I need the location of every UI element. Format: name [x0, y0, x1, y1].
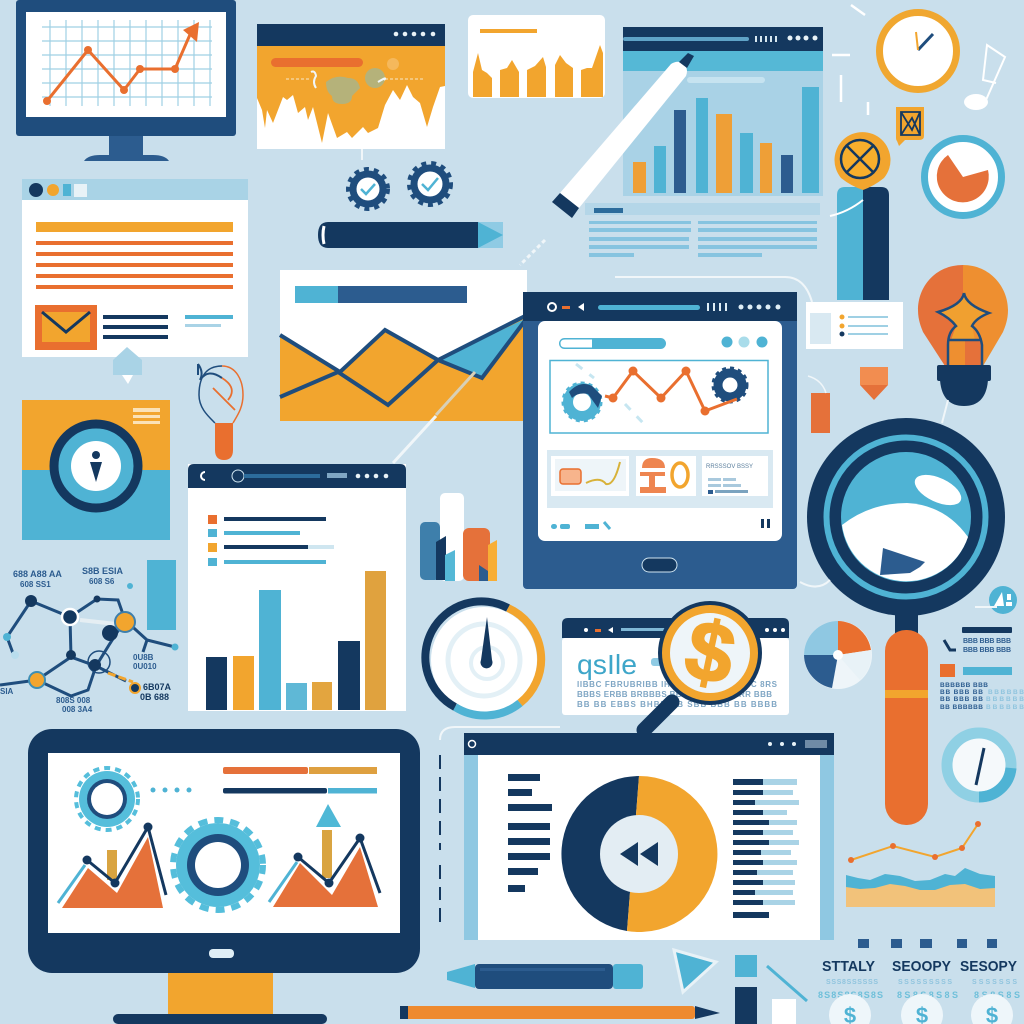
right mountain chart	[269, 804, 380, 907]
home button	[642, 558, 677, 572]
text block: right column notes: BB BBBBBB	[940, 704, 983, 711]
network labels: 008 3A4	[62, 705, 93, 714]
network labels: 0B 688	[140, 692, 169, 702]
text block: bottom-right labels: STTALY	[822, 958, 875, 975]
text block: bottom-right labels	[818, 939, 1020, 1024]
panel: small yellow bars card	[468, 15, 605, 98]
panel: bar chart window	[552, 27, 823, 257]
network labels: 6B07A	[143, 682, 172, 692]
network labels: 608 SS1	[20, 580, 51, 589]
panel: envelope line chart	[280, 270, 527, 421]
network labels: SIA	[0, 687, 14, 696]
list	[208, 515, 334, 566]
line chart box	[550, 360, 768, 433]
network labels	[0, 566, 172, 714]
icon: clock	[880, 12, 956, 90]
icon: target on pillar	[830, 132, 890, 300]
icon: dial	[947, 733, 1011, 797]
network labels: 0U8B	[133, 653, 154, 662]
orange trend line	[47, 30, 192, 101]
garbled caption: BB BB EBBS BHBB BB SBB BBB BB BBBB	[577, 700, 777, 709]
caption text lines	[585, 203, 820, 257]
icon: pie circle	[924, 138, 1002, 216]
dashed connector	[439, 755, 441, 925]
bars	[633, 87, 819, 193]
text block: right column notes: BB BBB BB	[940, 696, 983, 703]
small pie chart	[804, 621, 872, 689]
thumbnail row: RRSSSOV BSSY	[706, 464, 753, 470]
large gear	[173, 820, 263, 910]
text block: right column notes: BBBBBB	[986, 704, 1024, 711]
text block: bottom-right labels: 8S8S8S8S	[897, 990, 958, 1000]
icon: balloon pin	[198, 364, 243, 460]
icon: light bulb	[918, 265, 1008, 406]
gauge	[425, 601, 541, 716]
network labels: 0U010	[133, 662, 157, 671]
text block: bottom-right labels: SEOOPY	[892, 958, 951, 975]
network labels: S8B ESIA	[82, 566, 124, 576]
cyan rectangle block	[147, 560, 176, 630]
icon: magnifier with dollar: $	[678, 601, 743, 703]
icon: small 3D bars	[420, 493, 497, 581]
network labels: 608 S6	[89, 577, 115, 586]
panel: top-left monitor with line chart	[16, 0, 236, 161]
garbled caption: IIBBC FBRUBRIBB IHB BS 9RR BBB BBC 8RS	[577, 680, 778, 689]
text block: right column notes: BBBBBB BBB	[940, 682, 988, 689]
left bars	[508, 774, 552, 892]
text block: bottom-right labels: SSS8SSSSSS	[826, 979, 878, 986]
text block: bottom-right labels: SSSSSSSSS	[898, 979, 952, 986]
icon: orange pencil	[400, 1006, 720, 1019]
donut chart	[561, 776, 717, 932]
network labels: 808S 008	[56, 696, 91, 705]
progress bar	[559, 338, 666, 349]
icon: location pin with cone	[113, 347, 142, 384]
panel: search result window	[562, 618, 789, 715]
panel: orange waveform window	[257, 24, 445, 149]
icon: twin gears	[348, 163, 451, 209]
icon: orange arrow pentagon	[860, 367, 888, 400]
connector lines	[362, 5, 948, 740]
icon: orange tag	[896, 107, 924, 146]
text block: right column notes: BBB BBB BBB	[963, 638, 1011, 645]
right bars	[733, 779, 799, 918]
text block: bottom-right labels: SESOPY	[960, 958, 1017, 975]
small info card	[806, 302, 903, 349]
text block: bottom-right labels: 8S8S8S	[974, 990, 1020, 1000]
icon: cyan badge	[975, 586, 1017, 614]
legend bars	[223, 767, 308, 774]
text block: right column notes: BBBBBB	[988, 689, 1024, 696]
icon: magnifier with dollar	[644, 601, 762, 730]
icon: pennant flag	[674, 950, 716, 992]
diagram: node network with labels	[0, 566, 178, 714]
panel: bottom-left monitor	[28, 729, 420, 1024]
thumbnail row	[547, 450, 773, 508]
small gear	[76, 768, 138, 830]
panel: text document with envelope	[22, 179, 248, 357]
text block: right column notes: BBB BBB BBB	[963, 647, 1011, 654]
network labels: 688 A88 AA	[13, 569, 62, 579]
icon: blue marker pen	[447, 964, 643, 989]
panel: yellow/cyan card with circle icon	[22, 400, 170, 540]
icon: large magnifying glass	[807, 418, 1005, 825]
envelope	[35, 305, 97, 350]
panel: donut report window	[464, 733, 834, 940]
panel: tablet	[523, 292, 797, 589]
left mountain chart	[58, 822, 166, 908]
icon: music note	[964, 45, 1005, 110]
text lines	[36, 222, 233, 289]
text block: right column notes: BBBBBB	[986, 696, 1024, 703]
garbled caption	[577, 680, 778, 709]
garbled caption: BBBS ERBB BRBBBS BB BBBB BBB BRR BBB	[577, 690, 772, 699]
text block: bottom-right labels: 8S8S8S8S8S	[818, 990, 883, 1000]
logo text: qsIle	[577, 649, 637, 680]
orange tag block	[811, 393, 830, 433]
bars	[206, 571, 386, 710]
area chart with yellow trend	[846, 821, 995, 907]
text block: bottom-right labels: SSSSSSS	[972, 979, 1017, 986]
icon: navy marker bar	[318, 222, 503, 248]
text block: right column notes	[940, 627, 1024, 711]
text block: right column notes: BB BBB BB	[940, 689, 983, 696]
panel: list and bar chart window	[188, 464, 406, 711]
icon: small column and slash	[735, 955, 807, 1024]
pen	[552, 53, 694, 218]
